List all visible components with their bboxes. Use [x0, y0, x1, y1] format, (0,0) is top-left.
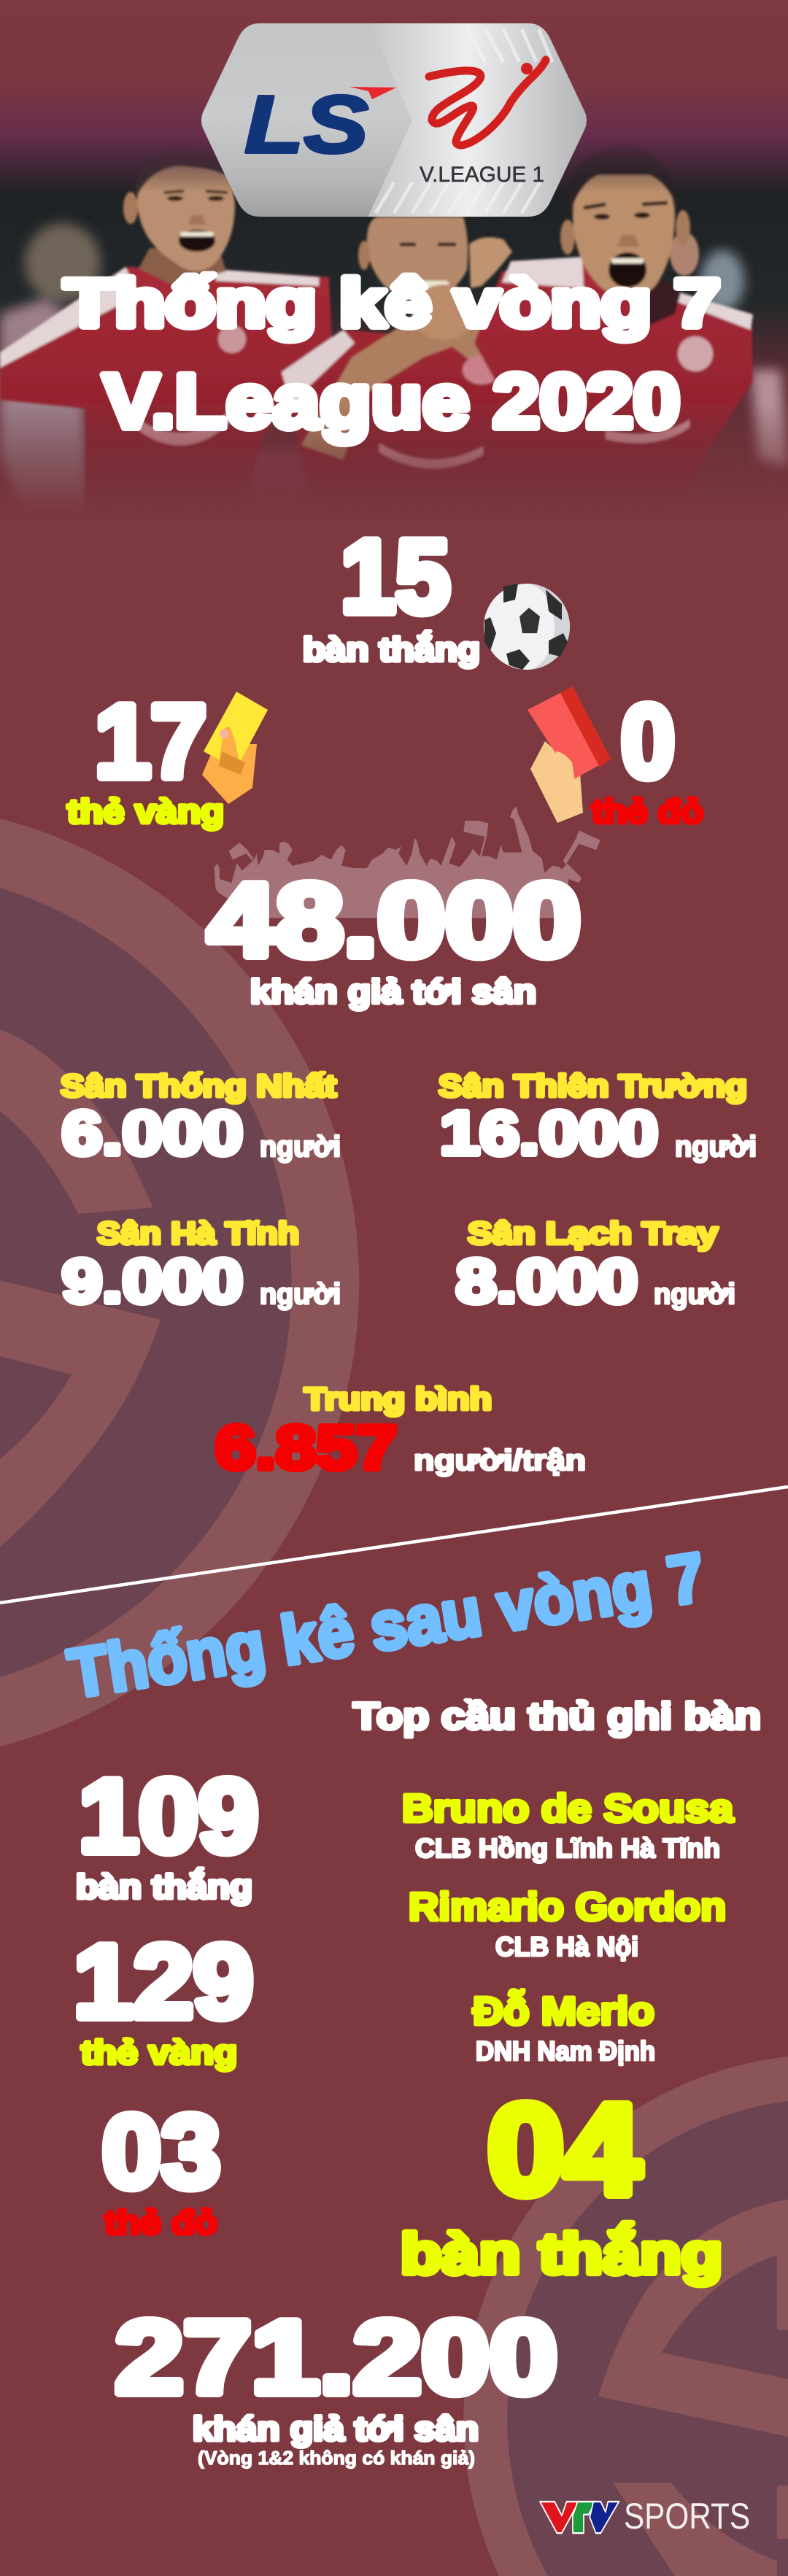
stadium: Thiên Trường: Sân Thiên Trường: [439, 1069, 747, 1104]
logo: VTV Sports: [540, 2496, 750, 2537]
stadium: Thiên Trường: 16.000: [440, 1099, 658, 1167]
stadium: Lạch Tray: 8.000: [456, 1247, 638, 1315]
stat: top scorer goals: 04: [487, 2078, 641, 2221]
stat: yellow cards: thẻ vàng: [67, 792, 224, 830]
scorer: Đỗ Merlo: Đỗ Merlo: [473, 1989, 654, 2033]
stat: goals in round 7: [303, 519, 480, 668]
stat: attendance round 7: 48.000: [208, 862, 581, 978]
stadium: Hà Tĩnh: 9.000: [62, 1247, 243, 1315]
stat: goals in round 7: bàn thắng: [303, 630, 480, 668]
stadium: Thiên Trường: [439, 1069, 757, 1167]
scorer: Đỗ Merlo: DNH Nam Định: [476, 2036, 655, 2066]
V.League 1 label: V.LEAGUE 1: [420, 163, 544, 187]
logo: VTV Sports: SPORTS: [624, 2496, 750, 2537]
stat: total goals: bàn thắng: [76, 1868, 252, 1906]
stadium: Thống Nhất: người: [260, 1131, 341, 1163]
stat: top scorer goals: bàn thắng: [401, 2221, 722, 2286]
stadium: Lạch Tray: người: [654, 1278, 735, 1310]
heading: top scorers: Top cầu thủ ghi bàn: [353, 1695, 761, 1738]
stat: yellow cards: 17: [95, 684, 206, 800]
icon: football: [484, 584, 570, 670]
scorer: Bruno de Sousa: [402, 1787, 734, 1863]
centre player: [282, 330, 562, 511]
stat: total yellow cards: thẻ vàng: [81, 2033, 237, 2071]
V.League ribbon mark: [429, 60, 546, 145]
decorative emblem: bottom-right circle: [463, 2057, 788, 2576]
title: V.League 2020: [103, 359, 680, 444]
stat: top scorer goals: [401, 2078, 722, 2286]
stat: total attendance: [115, 2300, 557, 2469]
heading: stats after round 7: Thống kê sau vòng 7: [63, 1538, 710, 1712]
stadium: Thống Nhất: [61, 1069, 341, 1167]
stat: total attendance: khán giả tới sân: [193, 2410, 479, 2448]
stadium: Lạch Tray: Sân Lạch Tray: [468, 1216, 718, 1251]
stat: attendance round 7: [208, 862, 581, 1010]
right player: [474, 262, 754, 469]
icon: hand holding red card: [528, 686, 611, 823]
stat: red cards: [592, 684, 703, 830]
stat: total yellow cards: 129: [74, 1924, 253, 2040]
stat: red cards: thẻ đỏ: [592, 792, 703, 830]
stat: yellow cards: [67, 684, 224, 830]
stat: average attendance: [215, 1382, 586, 1482]
title: [64, 266, 720, 444]
hero photo: three celebrating players: [0, 98, 788, 499]
scorer: Đỗ Merlo: [473, 1989, 655, 2066]
stat: total red cards: 03: [102, 2094, 220, 2210]
stat: attendance round 7: khán giả tới sân: [250, 972, 536, 1010]
stat: average attendance: Trung bình: [304, 1382, 492, 1417]
stat: total attendance: 271.200: [115, 2300, 557, 2416]
logo plate: LS V.League 1: [197, 22, 591, 219]
stat: total attendance: (Vòng 1&2 không có khán giả): [198, 2447, 475, 2469]
stat: goals in round 7: 15: [341, 519, 450, 635]
stat: average attendance: người/trận: [414, 1444, 586, 1477]
scorer: Bruno de Sousa: CLB Hồng Lĩnh Hà Tĩnh: [415, 1833, 720, 1863]
stat: red cards: 0: [621, 684, 675, 800]
scorer: Rimario Gordon: Rimario Gordon: [409, 1885, 726, 1929]
stat: average attendance: 6.857: [215, 1413, 397, 1482]
scorer: Rimario Gordon: [409, 1885, 726, 1962]
stat: total goals: 109: [79, 1758, 258, 1874]
stadium: Hà Tĩnh: Sân Hà Tĩnh: [97, 1216, 299, 1251]
left player: [0, 267, 332, 511]
icon: hand holding yellow card: [202, 692, 268, 804]
title: Thống kê vòng 7: [64, 266, 720, 341]
stadium: Lạch Tray: [456, 1216, 735, 1315]
scorer: Rimario Gordon: CLB Hà Nội: [495, 1932, 638, 1962]
stadium: Thiên Trường: người: [675, 1131, 757, 1163]
stadium: Thống Nhất: Sân Thống Nhất: [61, 1069, 336, 1104]
stadium: Thống Nhất: 6.000: [62, 1099, 243, 1167]
stat: total red cards: thẻ đỏ: [104, 2203, 217, 2241]
decorative emblem: left circle: [0, 819, 359, 1747]
LS wordmark: LS: [244, 79, 368, 170]
stadium: Hà Tĩnh: người: [260, 1278, 341, 1310]
stadium: Hà Tĩnh: [62, 1216, 341, 1315]
scorer: Bruno de Sousa: Bruno de Sousa: [402, 1787, 734, 1830]
crowd silhouette: [215, 806, 600, 918]
LS red swoosh: [349, 87, 396, 99]
